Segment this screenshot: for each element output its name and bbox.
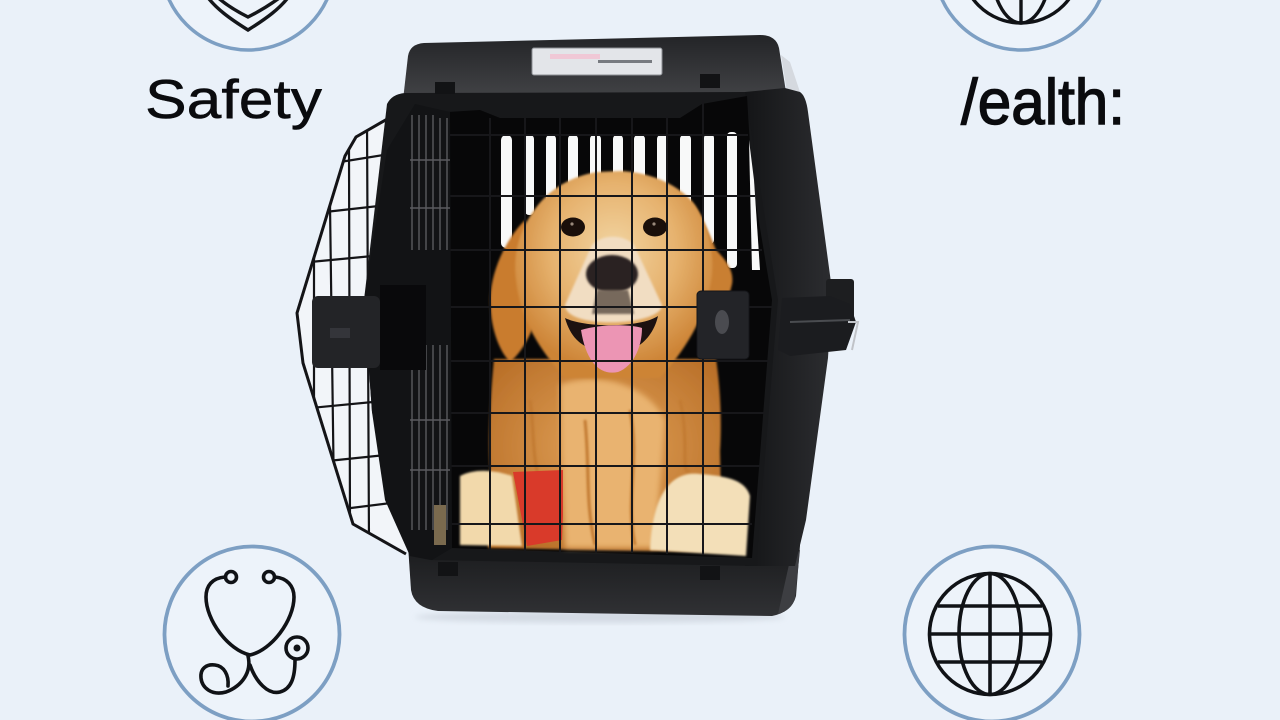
floor shadow — [415, 611, 785, 623]
crate with dog — [297, 35, 858, 623]
red toy — [513, 470, 563, 546]
icon: stethoscope in circle (bottom left) — [164, 546, 340, 720]
paws — [460, 471, 522, 546]
fur strands — [530, 400, 690, 545]
vent slits — [501, 132, 760, 270]
icon: globe in circle (bottom right) — [904, 546, 1080, 720]
dog — [460, 171, 750, 556]
icon: globe in circle (top right) — [934, 0, 1108, 50]
eyes — [561, 218, 667, 236]
ears — [490, 220, 545, 362]
crate base — [408, 545, 800, 616]
left door handle — [312, 285, 426, 370]
label plate on lid — [532, 48, 662, 75]
head — [515, 171, 712, 378]
crate hinges — [435, 74, 720, 580]
crate lid — [403, 35, 786, 110]
body — [488, 359, 722, 552]
nose — [586, 255, 638, 293]
open wire door — [297, 103, 415, 554]
right door latch — [697, 291, 749, 359]
crate right wall — [745, 88, 832, 566]
chest highlight — [560, 379, 665, 548]
heading: health (distorted lettering): /ealth: — [961, 66, 1125, 138]
mouth — [565, 316, 658, 350]
heading: Safety: Safety — [145, 68, 323, 130]
crate front frame — [364, 92, 778, 566]
tongue — [581, 325, 642, 373]
crate interior — [448, 96, 772, 558]
front cage wires — [450, 100, 772, 555]
crate right lip and latch bar — [778, 279, 858, 356]
icon: shield in circle (top left) — [161, 0, 335, 50]
door side rails — [364, 104, 452, 560]
muzzle — [565, 237, 662, 322]
